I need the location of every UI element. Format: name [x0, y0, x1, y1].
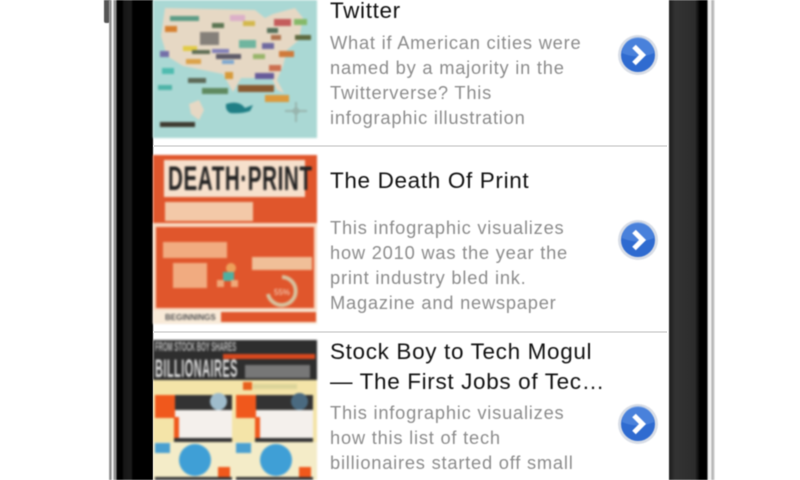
row description: named by a majority in the [330, 57, 565, 78]
compass [285, 102, 307, 122]
divider [153, 331, 667, 333]
row description: print industry bled ink. [330, 267, 527, 288]
list row: Stock Boy to Tech Mogul [153, 338, 658, 480]
donut chart: 55% [274, 288, 290, 297]
row title: Stock Boy to Tech Mogul [330, 339, 592, 364]
orange tag [243, 382, 252, 390]
row description [330, 217, 568, 314]
side button [104, 0, 110, 23]
column 2 [234, 392, 315, 480]
row description: how this list of tech [330, 427, 501, 448]
row title: The Death Of Print [330, 168, 529, 193]
masthead text: DEATH·PRINT [168, 160, 313, 198]
icon: blue chevron button [618, 34, 658, 76]
row description: infographic illustration [330, 107, 526, 128]
icon: blue chevron button [618, 220, 658, 260]
row description: how 2010 was the year the [330, 242, 568, 263]
thumbnail: billionaires [153, 340, 317, 480]
text box small [173, 263, 207, 288]
cream frame [153, 223, 317, 310]
row description: Magazine and newspaper [330, 292, 557, 313]
list row: Twitter map [151, 0, 658, 140]
dark header [153, 340, 317, 380]
lower panel [156, 227, 314, 308]
row description [330, 402, 574, 473]
intro box [165, 202, 253, 221]
whale [226, 103, 253, 113]
figure [216, 262, 240, 288]
left bezel [109, 0, 153, 480]
gray text block [245, 365, 310, 378]
footer label: BEGINNINGS [165, 313, 216, 322]
lower cream [153, 442, 317, 480]
thumbnail: US map [153, 0, 317, 138]
column 1 [153, 392, 234, 480]
list row: The Death Of Print [151, 153, 658, 325]
row description: This infographic visualizes [330, 217, 564, 238]
masthead [164, 160, 305, 197]
icon: blue chevron button [618, 404, 658, 444]
donut chart [265, 274, 299, 308]
text box left [163, 242, 227, 258]
map land [158, 8, 311, 127]
row description: This infographic visualizes [330, 402, 564, 423]
thumbnail: Death of Print [153, 155, 317, 324]
divider [153, 145, 667, 147]
row title: — The First Jobs of Tec… [330, 369, 605, 394]
text box right [252, 257, 312, 270]
red strip [223, 354, 315, 359]
footer bar [153, 310, 317, 324]
header large text: BILLIONAIRES [155, 355, 238, 383]
right bezel [669, 0, 715, 480]
phone frame [103, 0, 715, 480]
row description [330, 32, 581, 129]
row description: Twitterverse? This [330, 82, 492, 103]
row description: billionaires started off small [330, 452, 574, 473]
row description: What if American cities were [330, 32, 581, 53]
row title [329, 339, 605, 394]
tag text [253, 384, 297, 389]
